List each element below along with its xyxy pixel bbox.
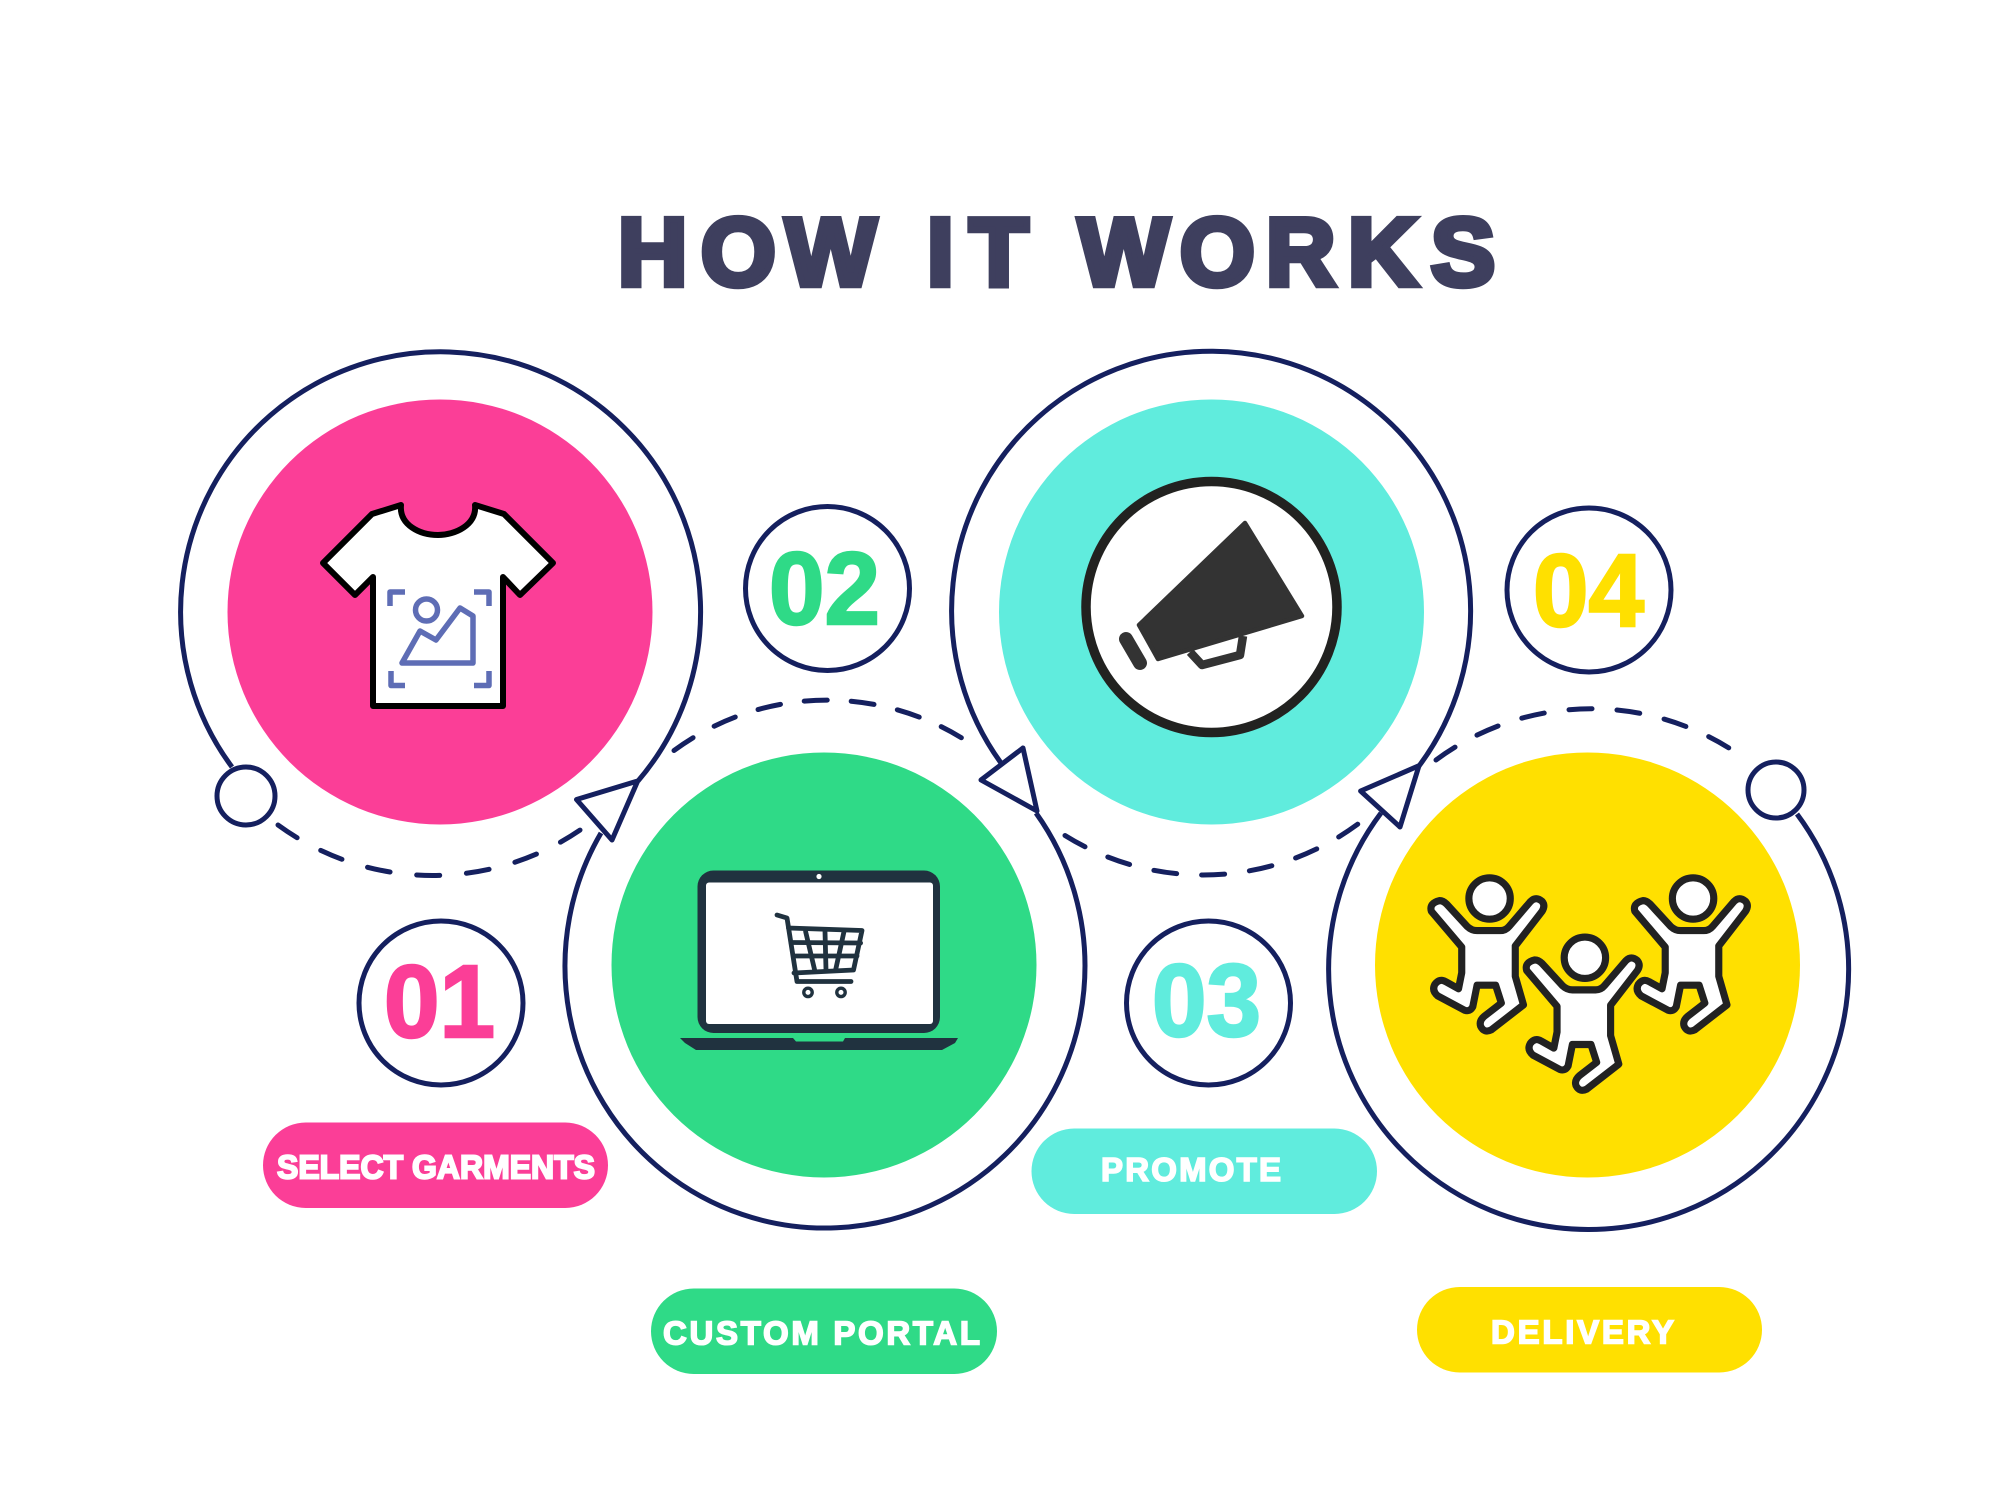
icon: three jumping people [1431,878,1747,1090]
label pill: promote: PROMOTE [1101,1151,1281,1188]
label pill: delivery [1417,1287,1762,1372]
outer ring 2 [565,813,1085,1228]
label pill: select garments: SELECT GARMENTS [277,1148,595,1186]
dashed connector 3 [1065,824,1358,875]
panel: step 2 custom portal [565,700,1085,1228]
pink disc [228,400,652,824]
label pill: custom portal: CUSTOM PORTAL [663,1314,980,1352]
outer ring 4 [1329,813,1849,1229]
number badge 04 [1507,508,1671,672]
number badge 02 [746,506,910,670]
teal disc [999,400,1424,824]
label pill: promote [1032,1128,1377,1214]
number badge 03 [1126,921,1290,1085]
icon: laptop with cart [680,870,958,1050]
end node [1748,762,1804,818]
number badge 03: 03 [1152,943,1261,1058]
panel: step 3 promote [952,351,1471,875]
number badge 01 [359,921,523,1085]
arrow: step 3 to 4 [1361,766,1419,827]
dashed connector 4 [1436,709,1729,760]
title: HOW IT WORKS [618,199,1495,306]
arrow: step 2 to 3 [981,748,1037,811]
number badge 04: 04 [1533,533,1644,648]
number badge 01: 01 [384,944,495,1059]
dashed connector 2 [674,700,965,750]
outer ring 3 [952,351,1471,766]
outer ring 1 [181,352,701,781]
dashed connector 1 [278,825,583,875]
label pill: select garments [263,1122,608,1208]
arrow: step 1 to 2 [576,781,638,840]
number badge 02: 02 [769,531,880,646]
icon: t-shirt [323,505,553,706]
label pill: custom portal [651,1288,997,1374]
icon: megaphone [1086,482,1337,732]
yellow disc [1375,752,1800,1178]
start node [217,767,275,825]
panel: step 4 delivery [1329,709,1849,1229]
panel: step 1 select garments [181,352,701,875]
green disc [612,752,1036,1178]
label pill: delivery: DELIVERY [1491,1314,1674,1350]
